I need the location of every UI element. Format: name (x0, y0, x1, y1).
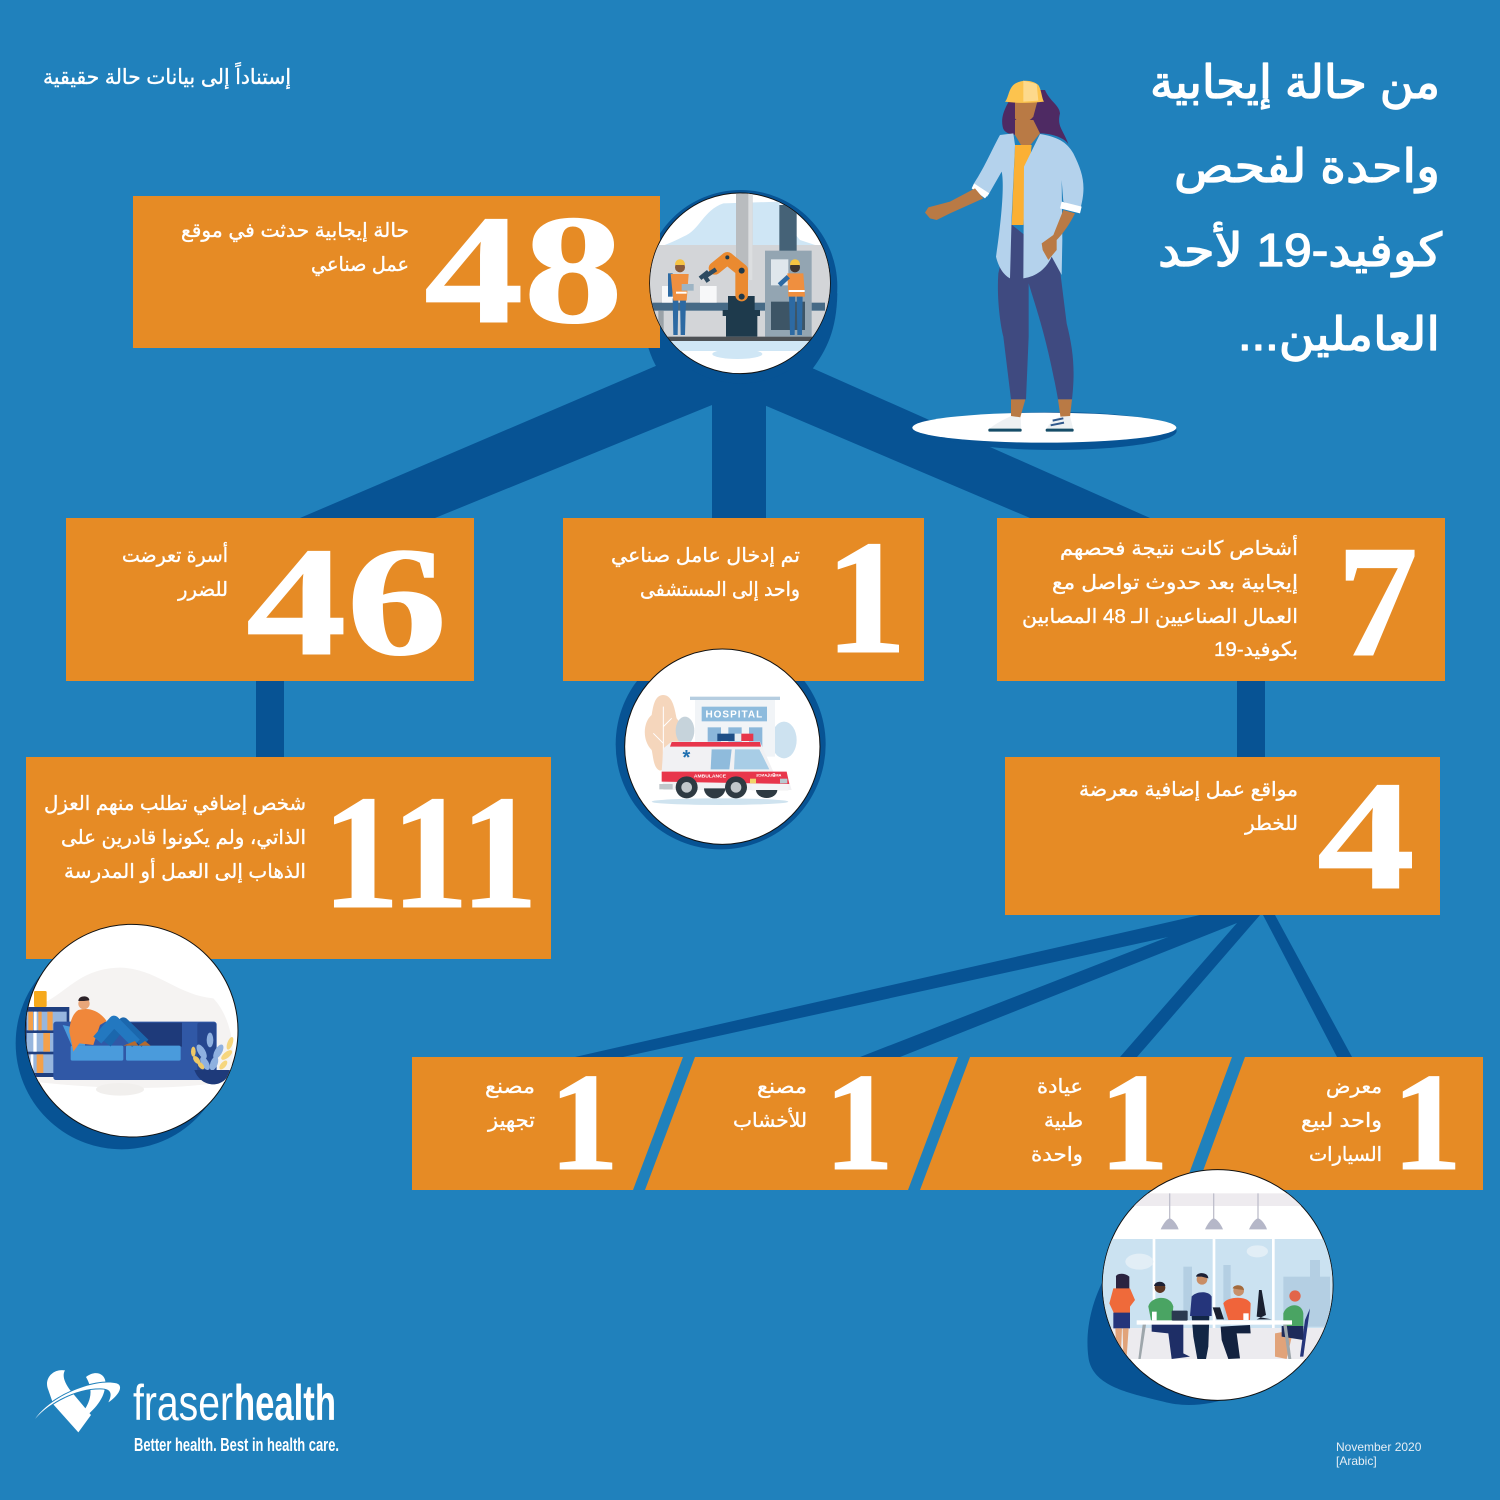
text hospitalized (611, 545, 800, 602)
panel: 46 (66, 515, 474, 688)
text 48: حالة إيجابية حدثت في موقع (181, 220, 409, 243)
text medical clinic: طبية (1044, 1110, 1083, 1132)
wordmark: health (234, 1375, 336, 1431)
panel: 1 hospitalized (563, 508, 924, 688)
connector lines between boxes (256, 362, 1352, 1057)
panel: processing plant (412, 1045, 683, 1200)
icon: hospital and ambulance circle: ƎƆИA⅃UᗺMA (756, 773, 782, 778)
text wood mill: للأخشاب (733, 1108, 807, 1132)
text car dealership: واحد لبيع (1301, 1110, 1382, 1132)
number 1: 1 (1392, 1045, 1462, 1200)
text 7: إيجابية بعد حدوث تواصل مع (1052, 572, 1298, 595)
icon: hospital and ambulance circle: AMBULANCE (694, 774, 727, 780)
date note: [Arabic] (1336, 1454, 1377, 1468)
text car dealership: معرض (1326, 1076, 1382, 1098)
text 7: العمال الصناعيين الـ 48 المصابين (1022, 606, 1298, 628)
wordmark (133, 1375, 339, 1455)
text 46: أسرة تعرضت (122, 542, 228, 567)
text wood mill (733, 1076, 807, 1132)
text medical clinic: عيادة (1037, 1076, 1083, 1098)
panel: car dealership (1196, 1045, 1483, 1200)
logo mark (35, 1370, 120, 1432)
wordmark: fraser (133, 1375, 233, 1431)
text wood mill: مصنع (757, 1076, 807, 1098)
logo: fraser health (35, 1370, 339, 1455)
text 111: الذاتي، ولم يكونوا قادرين على (61, 827, 306, 850)
text 4: مواقع عمل إضافية معرضة (1079, 779, 1298, 802)
text processing plant: مصنع (485, 1076, 535, 1098)
text hospitalized: تم إدخال عامل صناعي (611, 545, 800, 568)
text 111: شخص إضافي تطلب منهم العزل (44, 793, 306, 816)
text 7 (1022, 535, 1298, 661)
number 1: 1 (549, 1045, 619, 1200)
text 4: للخطر (1244, 813, 1298, 835)
number 48: 48 (424, 183, 623, 356)
date note: November 2020 (1336, 1440, 1422, 1454)
people (1109, 1273, 1310, 1359)
text processing plant: تجهيز (487, 1110, 535, 1132)
number 7: 7 (1337, 512, 1418, 690)
circle shadow: hospital (616, 639, 826, 849)
panel: medical clinic (920, 1045, 1232, 1200)
title: العاملين... (1238, 308, 1440, 362)
title: واحدة لفحص (1174, 140, 1440, 194)
panel: 7 (997, 512, 1445, 690)
text 111 (44, 793, 306, 884)
number 1: 1 (825, 508, 907, 688)
left worker (668, 259, 694, 335)
figure (925, 81, 1083, 432)
text 7: بكوفيد-19 (1214, 639, 1298, 661)
title: كوفيد-19 لأحد (1158, 221, 1442, 278)
text medical clinic (1031, 1076, 1083, 1166)
platform (912, 412, 1177, 450)
circle shadow: factory (644, 190, 837, 383)
text 48: عمل صناعي (311, 254, 409, 277)
text 7: أشخاص كانت نتيجة فحصهم (1060, 535, 1298, 560)
text car dealership: السيارات (1309, 1144, 1382, 1166)
circle shadow: sofa (16, 937, 228, 1149)
illustration: woman in hard hat (912, 81, 1177, 450)
text medical clinic: واحدة (1031, 1144, 1083, 1166)
panel: 48 (133, 183, 660, 356)
icon: hospital and ambulance circle: HOSPITAL (705, 710, 763, 721)
text 111: الذهاب إلى العمل أو المدرسة (64, 858, 306, 884)
date note (1336, 1440, 1422, 1468)
icon: person on sofa circle (23, 924, 238, 1137)
number 1: 1 (1099, 1045, 1169, 1200)
number 1: 1 (824, 1045, 894, 1200)
panel: 111 (26, 757, 551, 959)
icon: office meeting circle (1100, 1170, 1337, 1400)
number 46: 46 (246, 515, 447, 688)
text car dealership (1301, 1076, 1382, 1166)
text 48 (181, 220, 409, 277)
wordmark: Better health. Best in health care. (134, 1435, 339, 1455)
text 46 (122, 542, 228, 601)
number 4: 4 (1317, 749, 1415, 922)
text processing plant (485, 1076, 535, 1132)
title (1150, 56, 1442, 362)
icon: hospital and ambulance circle (625, 649, 820, 844)
panel: 4 (1005, 749, 1440, 922)
number 111: 111 (322, 763, 538, 943)
title: من حالة إيجابية (1150, 56, 1440, 110)
right worker (779, 259, 805, 335)
text hospitalized: واحد إلى المستشفى (640, 579, 800, 602)
circle shadow: office (1087, 1260, 1247, 1405)
icon: factory circle (647, 190, 833, 374)
source note: إستناداً إلى بيانات حالة حقيقية (43, 61, 291, 90)
text 46: للضرر (177, 579, 228, 601)
text 4 (1079, 779, 1298, 835)
panel: wood mill (645, 1045, 958, 1200)
icon: hospital and ambulance circle: * (682, 747, 690, 769)
